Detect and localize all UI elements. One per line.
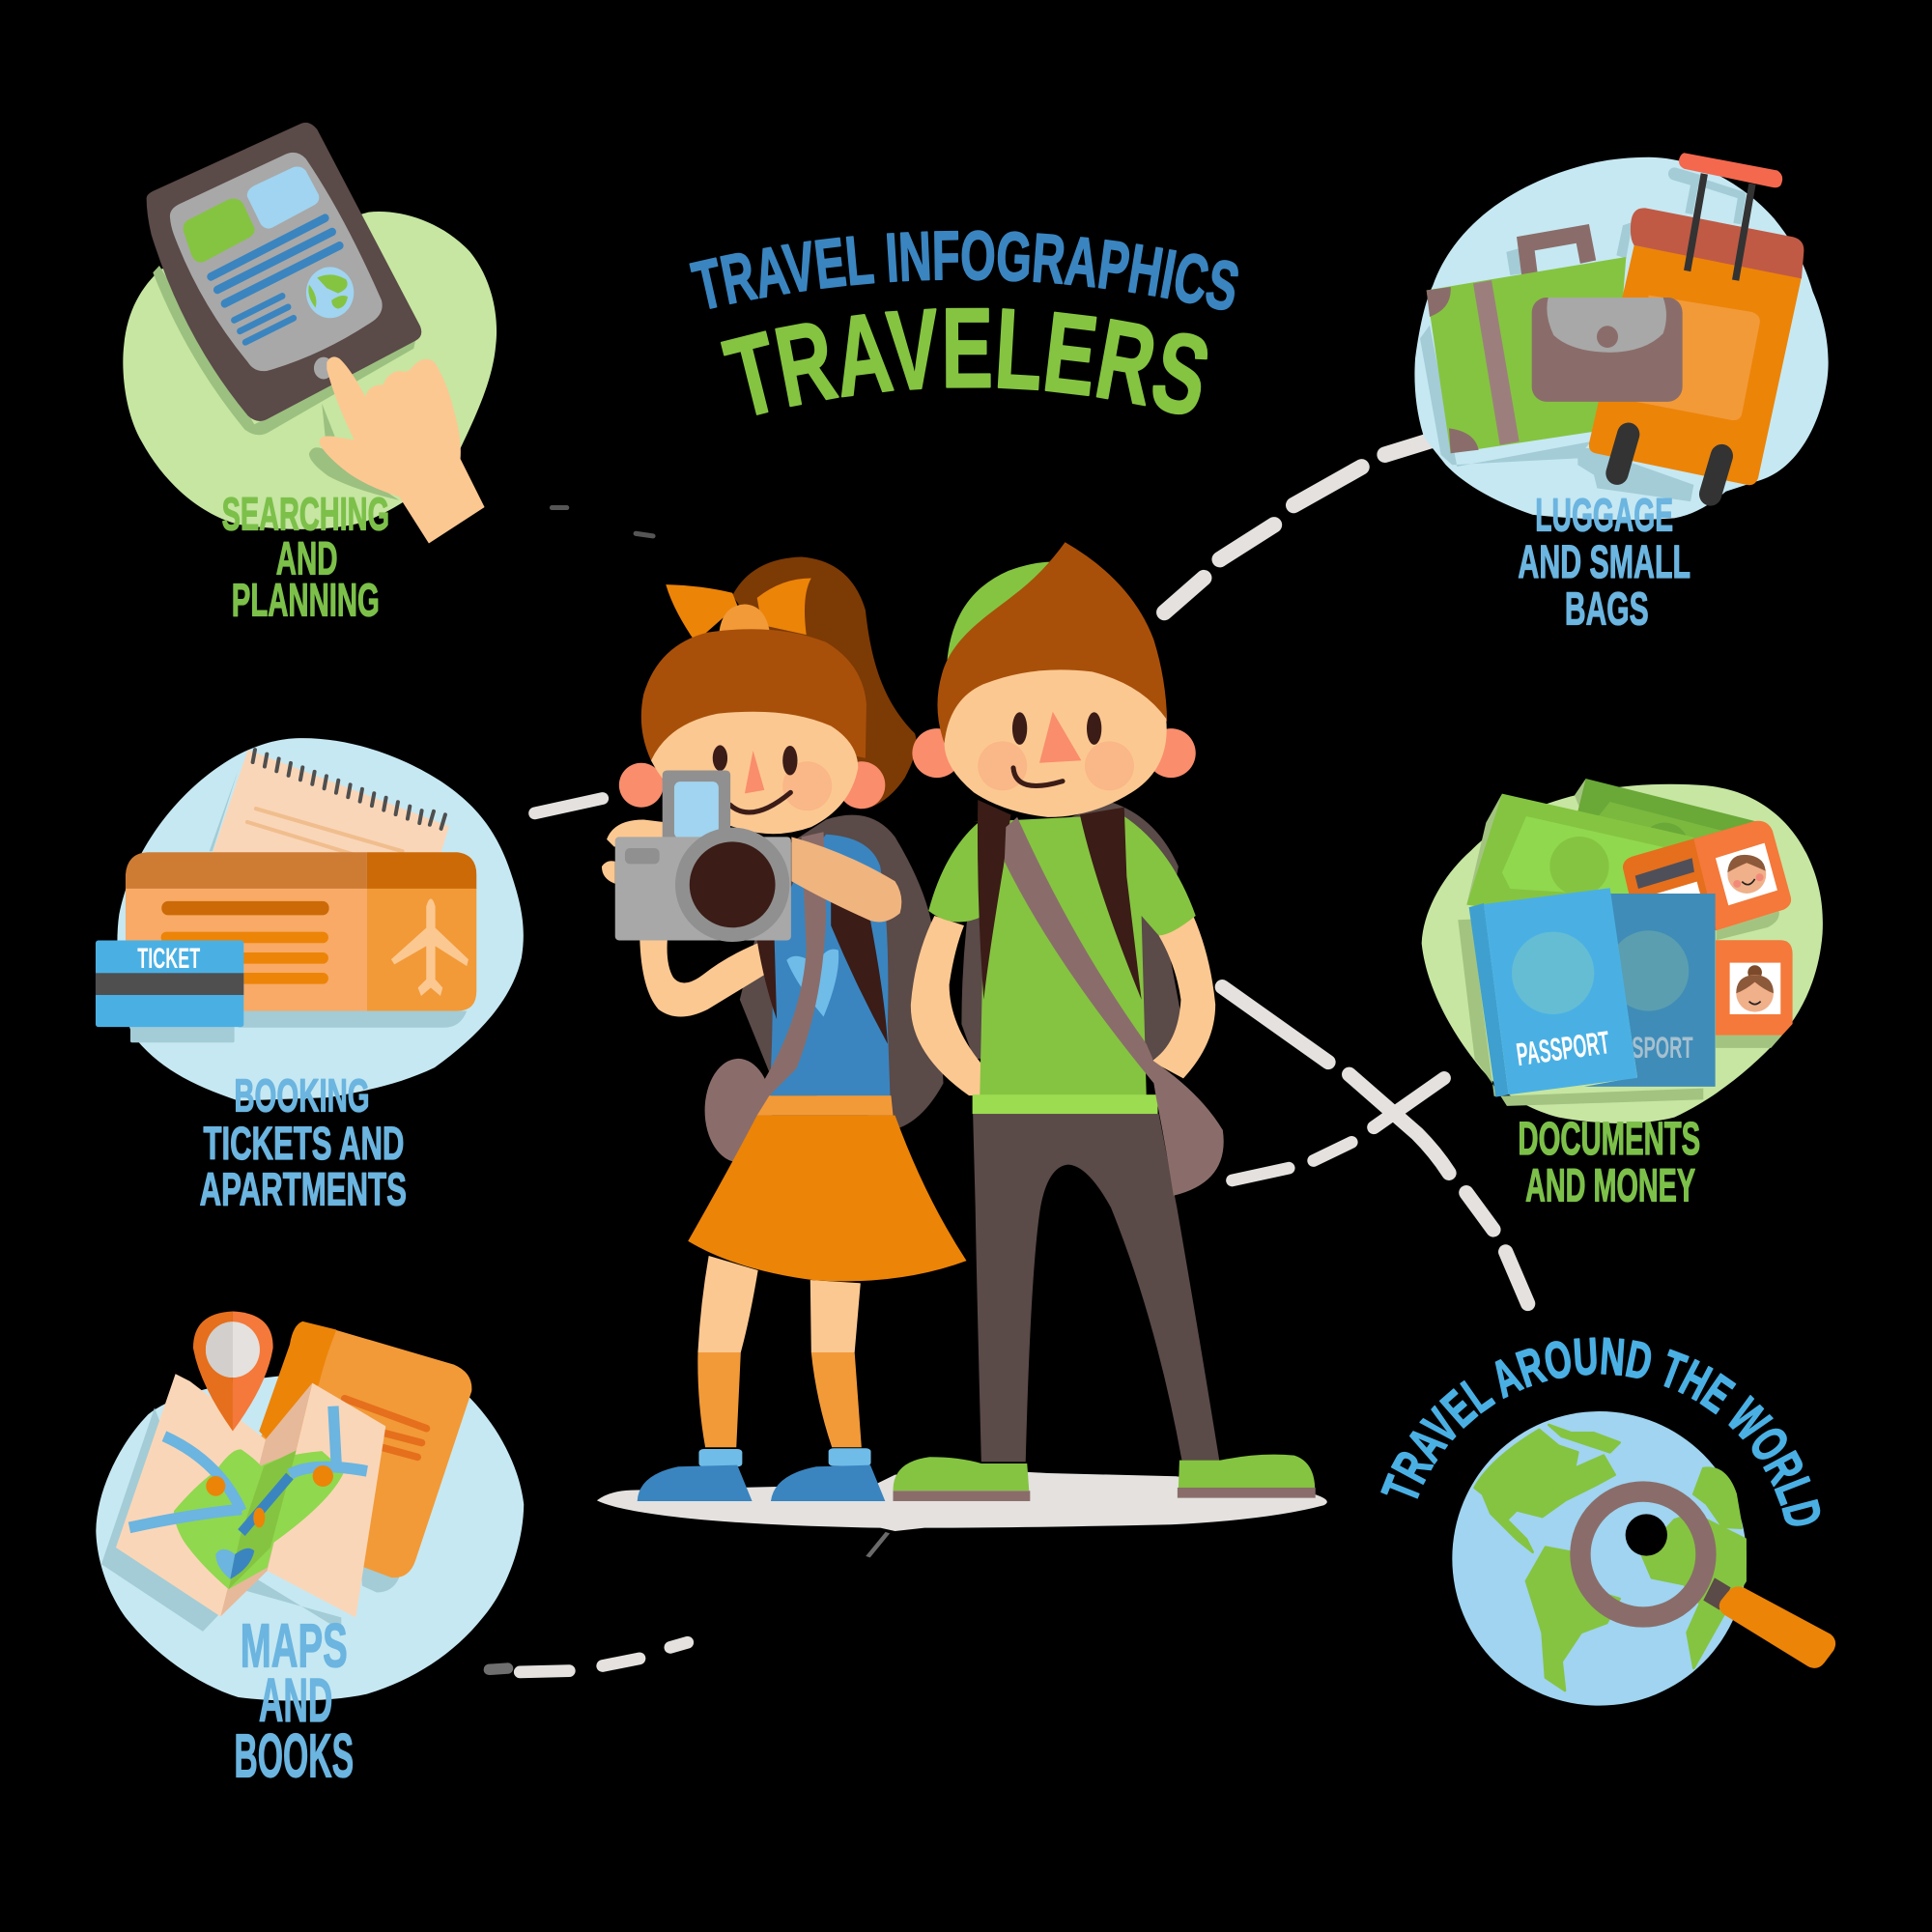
icon: front passport: PASSPORT: [1515, 1025, 1611, 1073]
label: luggage and small bags: BAGS: [1565, 583, 1649, 636]
icon: banknotes: [1466, 779, 1755, 915]
character: girl with camera: [602, 557, 967, 1501]
panel: searching and planning: [123, 123, 497, 627]
icon: back passport: [1584, 894, 1716, 1087]
label: searching and planning: SEARCHING: [222, 488, 389, 540]
tablet shadow: [153, 266, 415, 435]
heading: travel around the world: TRAVEL AROUND THE WORLD: [1380, 1337, 1820, 1526]
icon shadows: [101, 1407, 399, 1632]
blob background: [1422, 784, 1823, 1123]
boy face: [945, 669, 1167, 817]
icon: front passport: [1458, 888, 1703, 1106]
boy backpack: [961, 803, 1180, 1061]
girl bag strap: [750, 832, 826, 1116]
icon: pointing hand: [320, 356, 485, 543]
ground shadow: [597, 1471, 1327, 1557]
icon: notebook: [210, 750, 449, 858]
girl legs and shoes: [638, 1256, 885, 1501]
icon: globe: [1452, 1411, 1747, 1706]
label: booking tickets and apartments: [200, 1070, 407, 1215]
label: maps and books: BOOKS: [234, 1720, 354, 1790]
boy ears: [912, 728, 1196, 778]
panel: maps and books: [96, 1312, 524, 1790]
icon: orange trolley suitcase: [1589, 153, 1804, 495]
label: searching and planning: AND: [276, 532, 337, 584]
label: maps and books: MAPS: [241, 1611, 348, 1681]
panel: documents and money: [1422, 779, 1823, 1212]
boy pants: [973, 1114, 1219, 1462]
label: maps and books: [234, 1611, 354, 1790]
boy shoes: [893, 1455, 1316, 1501]
girl lower arm: [639, 938, 764, 1017]
panel: booking tickets and apartments: [96, 738, 524, 1215]
girl hair: [641, 629, 867, 760]
label: searching and planning: PLANNING: [232, 575, 380, 627]
blob background: [123, 212, 497, 529]
label: booking tickets and apartments: APARTMENTS: [200, 1163, 407, 1215]
icon: id card bottom: [1716, 940, 1793, 1048]
character: boy: [911, 542, 1224, 1462]
icon: magnifying glass: [1580, 1492, 1835, 1668]
icon: folded map: [116, 1374, 385, 1617]
label: documents and money: [1518, 1113, 1700, 1212]
label: luggage and small bags: LUGGAGE: [1535, 490, 1673, 542]
label: booking tickets and apartments: TICKETS AND: [203, 1118, 404, 1170]
boy backpack straps: [978, 800, 1142, 1000]
girl raised arm: [791, 837, 901, 923]
label: maps and books: AND: [259, 1665, 332, 1735]
boy hair: [937, 542, 1167, 743]
dashed route lines: [489, 439, 1528, 1672]
icon: back passport: SPORT: [1632, 1030, 1693, 1065]
girl blue top: [757, 835, 890, 1095]
icon: tablet: [147, 123, 421, 421]
girl skirt: [688, 1116, 967, 1281]
title line: travel infographics: TRAVEL INFOGRAPHICS: [690, 230, 1238, 311]
girl face: [651, 712, 858, 834]
icon: id card top: [1623, 821, 1791, 940]
icon: camera: [615, 770, 791, 942]
icon: location pin: [193, 1312, 273, 1432]
label: searching and planning: [222, 488, 389, 627]
hand shadow: [309, 404, 399, 500]
icon: boarding pass: [126, 852, 476, 1042]
panel: luggage and small bags: [1414, 153, 1829, 636]
icon: book: [258, 1321, 471, 1577]
girl backpack: [740, 815, 944, 1127]
label: booking tickets and apartments: BOOKING: [234, 1070, 370, 1122]
girl body and head: [602, 557, 967, 1281]
icon shadows: [1420, 222, 1693, 501]
girl hand: [602, 819, 664, 884]
blob background: [96, 1373, 524, 1701]
icon: plane: [391, 898, 469, 996]
girl side bag: [705, 1059, 772, 1162]
label: luggage and small bags: AND SMALL: [1518, 536, 1690, 588]
icon: ticket card: TICKET: [137, 943, 201, 975]
girl ponytail: [732, 557, 917, 808]
boy t-shirt: [928, 814, 1196, 1114]
boy arms: [911, 916, 1215, 1095]
label: documents and money: AND MONEY: [1525, 1160, 1695, 1212]
girl waistband: [757, 1095, 893, 1116]
label: luggage and small bags: [1518, 490, 1690, 636]
boy hat: [947, 562, 1052, 665]
girl bow: [666, 578, 811, 642]
icon: green suitcase: [1427, 234, 1626, 453]
panel: travel around the world: [1380, 1337, 1835, 1706]
icon: pouch: [1532, 298, 1683, 402]
blob background: [1414, 157, 1829, 520]
title line: travelers: TRAVELERS: [721, 307, 1208, 415]
blob background: [117, 738, 524, 1101]
title: [690, 230, 1238, 415]
girl ears: [619, 761, 885, 809]
label: documents and money: DOCUMENTS: [1518, 1113, 1700, 1165]
boy satchel: [1005, 817, 1224, 1196]
icon: ticket card: [96, 941, 243, 1027]
icon: suitcase handle shadow: [1689, 181, 1742, 224]
